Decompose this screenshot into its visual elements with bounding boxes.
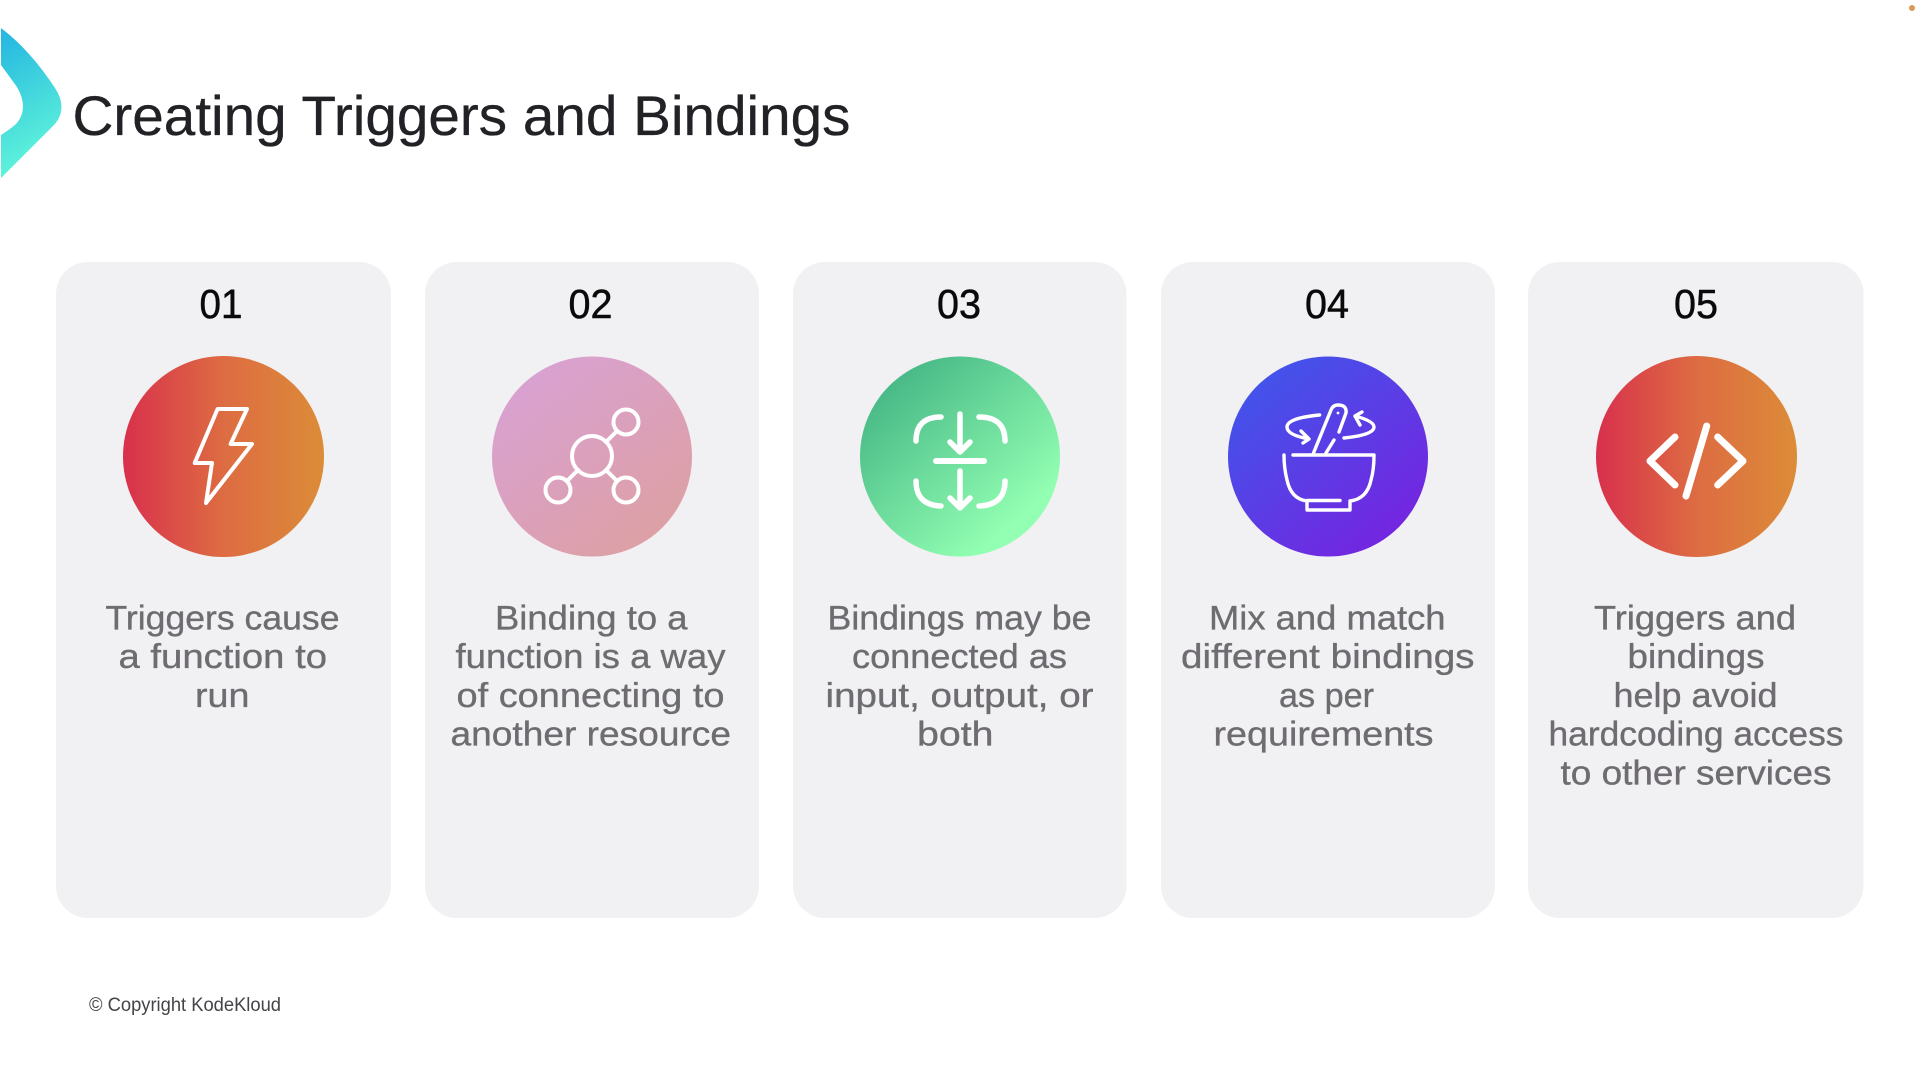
status dot bbox=[1909, 5, 1915, 11]
text: triggers and bindings help: to other services bbox=[1560, 754, 1832, 792]
text: triggers and bindings help: bindings bbox=[1628, 638, 1764, 676]
text: bindings may be connected: connected as bbox=[852, 638, 1067, 676]
text: mix and match bbox=[1181, 600, 1474, 754]
text: triggers cause a function to run: Triggers cause bbox=[106, 600, 340, 638]
panel: card 05 bbox=[1528, 262, 1864, 918]
icon: lightning bolt bbox=[123, 356, 324, 557]
text: bindings may be connected: both bbox=[917, 716, 994, 754]
text: bindings may be connected: input, output, or bbox=[826, 677, 1094, 715]
number 02: 02 bbox=[568, 281, 612, 327]
logo chevron bbox=[1, 28, 62, 178]
text: bindings may be connected bbox=[826, 600, 1094, 754]
text: triggers cause a function to run bbox=[106, 600, 340, 715]
text: mix and match: as per bbox=[1279, 677, 1374, 715]
panel: card 04 bbox=[1161, 262, 1495, 918]
text: triggers and bindings help bbox=[1548, 600, 1844, 792]
text: mix and match: different bindings bbox=[1181, 638, 1474, 676]
text: binding to a function: Binding to a bbox=[495, 600, 688, 638]
text: binding to a function bbox=[450, 600, 731, 754]
icon: mortar and pestle bbox=[1228, 356, 1428, 556]
text: mix and match: requirements bbox=[1214, 716, 1434, 754]
text: triggers cause a function to run: run bbox=[195, 677, 250, 715]
text: triggers and bindings help: help avoid bbox=[1614, 677, 1778, 715]
panel: card 03 bbox=[793, 262, 1126, 918]
text: binding to a function: of connecting to bbox=[456, 677, 724, 715]
text: bindings may be connected: Bindings may be bbox=[828, 600, 1092, 638]
panel: card 01 bbox=[56, 262, 391, 918]
text: mix and match: Mix and match bbox=[1209, 600, 1446, 638]
number 01: 01 bbox=[200, 281, 242, 327]
text: binding to a function: function is a way bbox=[456, 638, 726, 676]
icon: input output arrows bbox=[860, 356, 1060, 556]
icon: code brackets bbox=[1596, 356, 1797, 557]
icon: connected nodes bbox=[492, 356, 692, 556]
text: triggers cause a function to run: a function to bbox=[118, 638, 327, 676]
text: triggers and bindings help: Triggers and bbox=[1594, 600, 1796, 638]
text: triggers and bindings help: hardcoding access bbox=[1548, 716, 1844, 754]
text: binding to a function: another resource bbox=[450, 716, 731, 754]
number 05: 05 bbox=[1674, 281, 1718, 327]
number 04: 04 bbox=[1305, 281, 1349, 327]
title: Creating Triggers and Bindings bbox=[72, 84, 850, 147]
number 03: 03 bbox=[937, 281, 981, 327]
copyright footer: © Copyright KodeKloud bbox=[89, 995, 281, 1016]
panel: card 02 bbox=[425, 262, 759, 918]
